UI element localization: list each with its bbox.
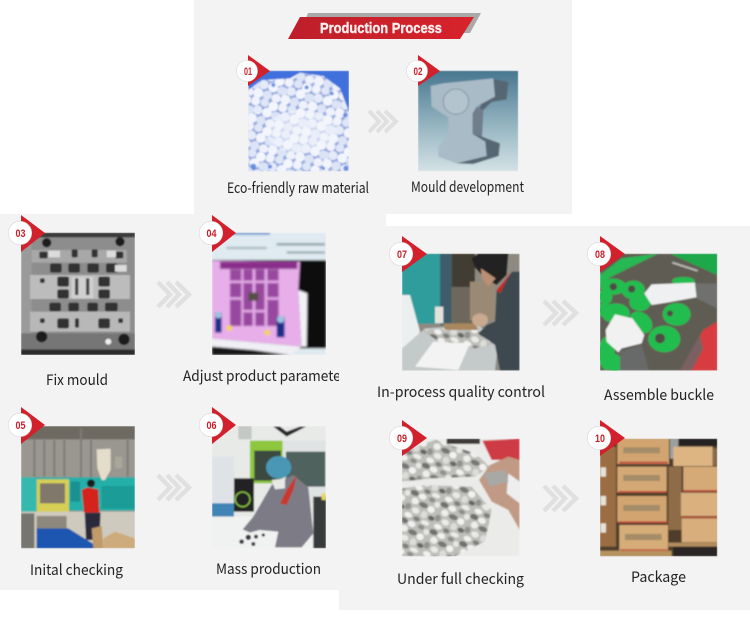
badge 06: 06 — [206, 420, 216, 432]
step 10 label: Package — [631, 566, 686, 587]
badge 05: 05 — [16, 420, 26, 432]
arrow: 01 to 02 — [369, 111, 396, 132]
badge 07: 07 — [397, 249, 407, 261]
badge 09: 09 — [397, 433, 407, 445]
step 03: fix mould — [8, 215, 135, 390]
title banner — [288, 13, 481, 39]
badge 03 — [8, 215, 45, 252]
badge 04: 04 — [206, 228, 217, 240]
step 08 label: Assemble buckle — [604, 384, 714, 405]
badge 04 — [199, 215, 236, 252]
step 03 label: Fix mould — [46, 369, 108, 390]
photo: worker in hairnet at machine — [212, 426, 326, 548]
step 09: under full checking — [389, 420, 524, 589]
badge 02 — [406, 55, 440, 86]
badge 10 — [587, 420, 625, 456]
step 06: mass production — [199, 407, 326, 579]
step 01 label: Eco-friendly raw material — [227, 177, 369, 198]
badge 02: 02 — [414, 66, 422, 78]
panel: left section — [0, 214, 386, 590]
arrow: 09 to 10 — [544, 486, 576, 511]
badge 08 — [587, 236, 625, 272]
step 09 label: Under full checking — [397, 568, 524, 589]
arrow: 07 to 08 — [544, 301, 576, 325]
badge 05 — [8, 407, 45, 444]
badge 08: 08 — [595, 249, 605, 261]
step 10: package — [587, 420, 717, 587]
photo: injection machine and worker — [21, 426, 135, 548]
step 08: assemble buckle — [587, 236, 717, 405]
photo: steel mould, grayscale — [21, 233, 135, 355]
badge 01: 01 — [244, 66, 252, 78]
badge 03: 03 — [16, 228, 26, 240]
arrow: 03 to 04 — [158, 282, 189, 307]
panel: right section — [339, 226, 750, 610]
step 04 label: Adjust product parameter — [183, 365, 346, 386]
step 05: initial checking — [8, 407, 135, 580]
arrow: 05 to 06 — [158, 475, 189, 500]
step 02 label: Mould development — [411, 176, 524, 197]
photo: 3D mould part render — [418, 71, 518, 171]
photo: monitor showing pink mould layout — [212, 233, 326, 355]
badge 09 — [389, 420, 427, 456]
step 06 label: Mass production — [216, 558, 321, 579]
title banner: Production Process — [320, 21, 442, 37]
step 05 label: Inital checking — [30, 559, 123, 580]
photo: hands sorting silver parts — [402, 439, 520, 556]
photo: white plastic beads — [248, 71, 349, 171]
badge 01 — [236, 55, 270, 86]
badge 10: 10 — [595, 433, 605, 445]
step 07: in-process quality control — [377, 236, 545, 402]
photo: stacked cardboard boxes — [600, 439, 717, 556]
badge 07 — [389, 236, 427, 272]
photo: inspector at a table — [402, 254, 520, 371]
step 04: adjust parameters — [183, 215, 346, 386]
step 01: raw material — [227, 55, 369, 198]
badge 06 — [199, 407, 236, 444]
step 07 label: In-process quality control — [377, 381, 545, 402]
panel: top section — [194, 0, 572, 214]
photo: gloved hands with green buckles — [599, 254, 717, 373]
step 02: mould development — [406, 55, 524, 197]
